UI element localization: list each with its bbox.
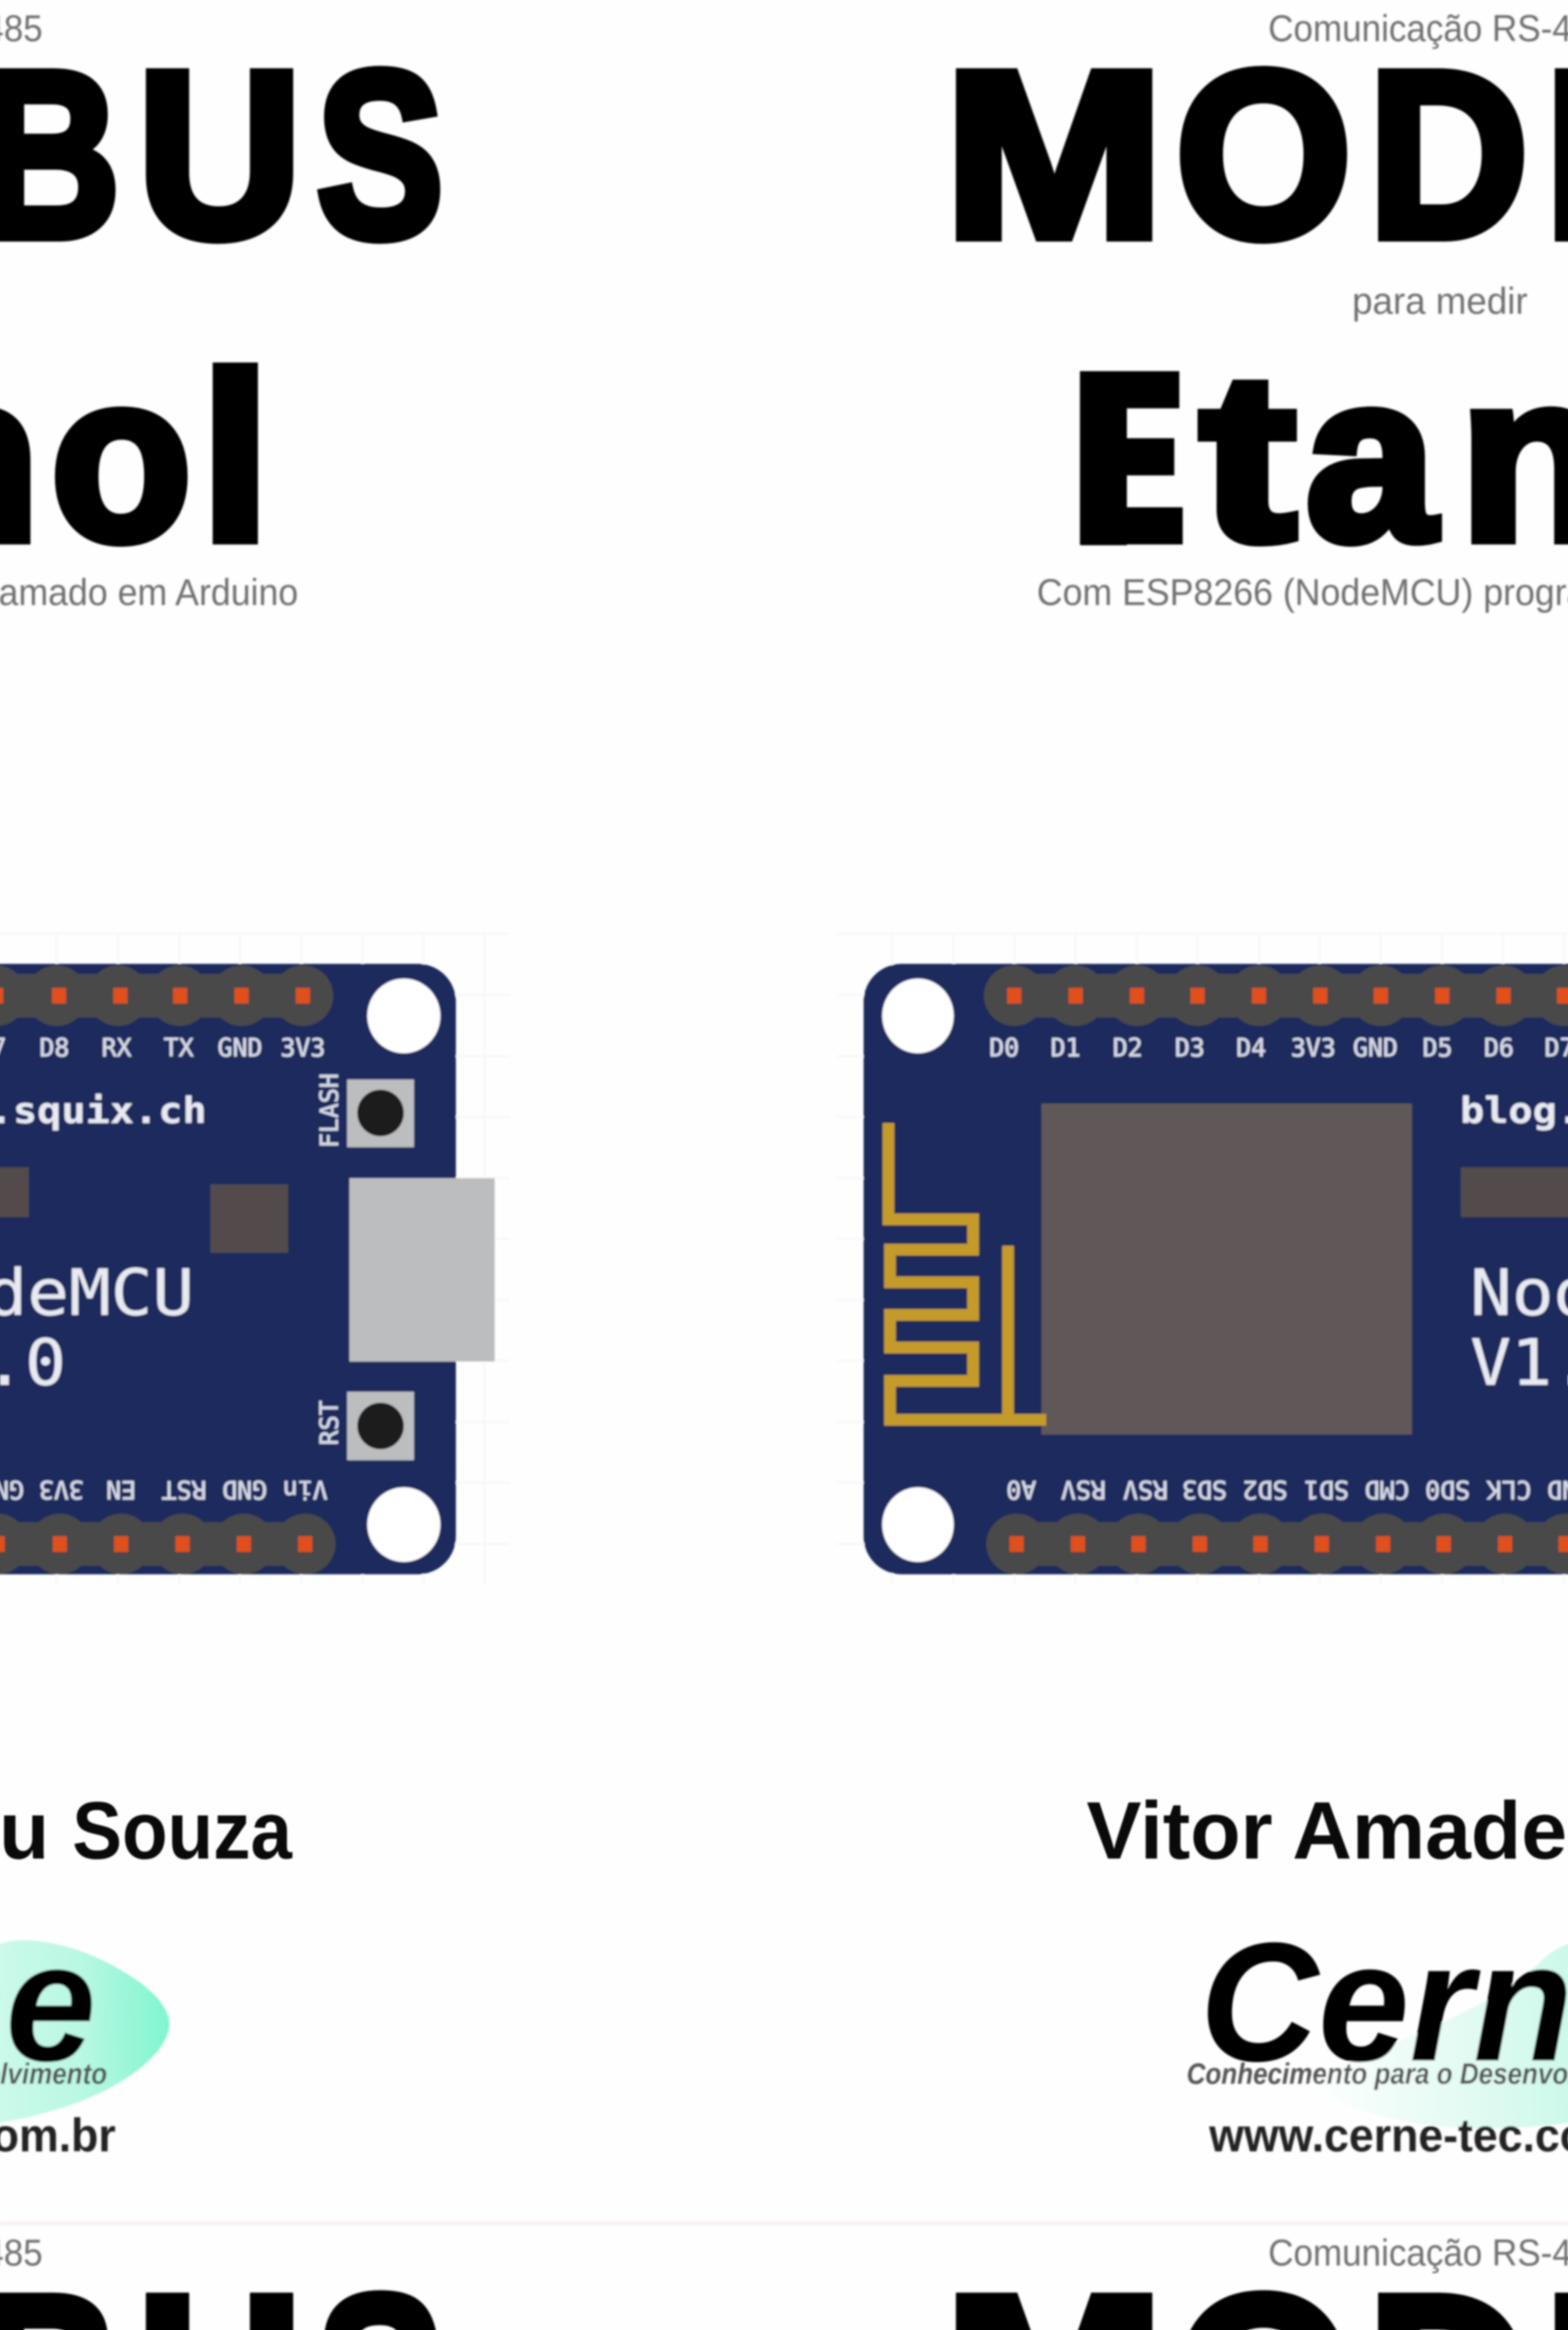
top pin labels: D5	[1423, 1033, 1452, 1062]
bottom pin labels, upside down: GND	[222, 1475, 267, 1504]
bottom pin labels, upside down: SD3	[1182, 1475, 1227, 1504]
title MODBUS, left part	[0, 23, 443, 287]
top pin labels: D2	[1113, 1033, 1142, 1062]
title MODBUS, right part: M	[944, 23, 1164, 287]
top pin labels: 3V3	[280, 1033, 325, 1062]
cover seam line	[0, 2221, 1568, 2225]
NodeMCU board, left half of image (board's right end)	[0, 964, 495, 1574]
top pin labels: RX	[102, 1033, 131, 1062]
serial chip bar	[0, 1167, 29, 1217]
reset button: RST	[315, 1400, 344, 1445]
logo blob, right part	[1305, 1940, 1568, 2128]
top pin labels: 3V3	[1291, 1033, 1336, 1062]
author name, left part: Souza	[72, 1786, 292, 1876]
repeated title, right part	[944, 2283, 1568, 2330]
bottom pin holes	[0, 1536, 312, 1552]
title Etanol, right part: E	[1073, 326, 1185, 589]
title MODBUS, left part: S	[317, 23, 443, 287]
title Etanol, left part: o	[51, 326, 191, 589]
faint grid behind board, right part	[837, 934, 1568, 1584]
bottom pin labels, upside down	[0, 1475, 328, 1504]
repeated title strip at page bottom	[0, 2283, 1568, 2330]
top pin labels	[0, 1033, 325, 1062]
bottom pin labels, upside down: A0	[1007, 1475, 1036, 1504]
bottom pin labels, upside down: RSV	[1061, 1475, 1106, 1504]
top pin labels: D0	[989, 1033, 1019, 1062]
bottom pin labels, upside down	[1007, 1475, 1568, 1504]
wifi module shield	[1041, 1104, 1412, 1435]
flash button	[315, 1073, 414, 1148]
top pin header	[0, 965, 333, 1026]
top pin labels: D6	[1484, 1033, 1514, 1062]
bottom pin labels, upside down: SD1	[1304, 1475, 1349, 1504]
top pin labels: TX	[164, 1033, 193, 1062]
mounting holes	[882, 979, 954, 1562]
title MODBUS, right part: D	[1368, 23, 1528, 287]
top pin holes	[1007, 988, 1568, 1003]
repeated title, left part	[0, 2283, 443, 2330]
bottom pin labels, upside down: RSV	[1123, 1475, 1168, 1504]
bottom pin labels, upside down: Vin	[283, 1475, 328, 1504]
reset button	[315, 1392, 414, 1460]
pcb body	[0, 964, 456, 1574]
top pin labels: D4	[1236, 1033, 1266, 1062]
antenna trace	[888, 1123, 1046, 1420]
faint grid behind board, left part	[0, 934, 509, 1584]
title Etanol, left part: l	[201, 326, 269, 589]
flash button: FLASH	[315, 1073, 344, 1148]
bottom pin labels, upside down: 3V3	[39, 1475, 84, 1504]
title Etanol, left part	[0, 326, 269, 589]
logo blob, left part	[0, 1940, 169, 2128]
top pin labels: GND	[1353, 1033, 1398, 1062]
mounting holes	[367, 979, 440, 1562]
title Etanol, right part: t	[1201, 326, 1295, 589]
bottom pin labels, upside down: EN	[106, 1475, 136, 1504]
top pin labels: GND	[217, 1033, 262, 1062]
top pin header	[984, 965, 1568, 1026]
title MODBUS, right part: O	[1176, 23, 1351, 287]
title Etanol, right part	[1073, 326, 1568, 589]
title MODBUS, left part: U	[137, 23, 302, 287]
top pin labels: D3	[1175, 1033, 1205, 1062]
usb connector	[349, 1178, 495, 1361]
title MODBUS, right part	[944, 23, 1568, 287]
serial chip bar	[1461, 1167, 1568, 1217]
bottom pin header	[986, 1514, 1568, 1574]
bottom pin labels, upside down: CMD	[1365, 1475, 1410, 1504]
bottom pin labels, upside down: SD0	[1425, 1475, 1470, 1504]
bottom pin header	[0, 1514, 336, 1574]
NodeMCU board, right half of image (board's left end)	[864, 964, 1568, 1574]
bottom pin labels, upside down: RST	[162, 1475, 207, 1504]
bottom pin labels, upside down: SD2	[1243, 1475, 1288, 1504]
top pin labels: D8	[40, 1033, 69, 1062]
pcb body	[864, 964, 1568, 1574]
top pin holes	[0, 988, 310, 1003]
bottom pin holes	[1010, 1536, 1568, 1552]
title Etanol, right part: a	[1306, 326, 1435, 589]
connector text para medir: para medir	[1352, 281, 1528, 322]
top pin labels	[989, 1033, 1568, 1062]
bottom pin labels, upside down: CLK	[1486, 1475, 1531, 1504]
top pin labels: D1	[1051, 1033, 1080, 1062]
small chip	[210, 1184, 288, 1253]
